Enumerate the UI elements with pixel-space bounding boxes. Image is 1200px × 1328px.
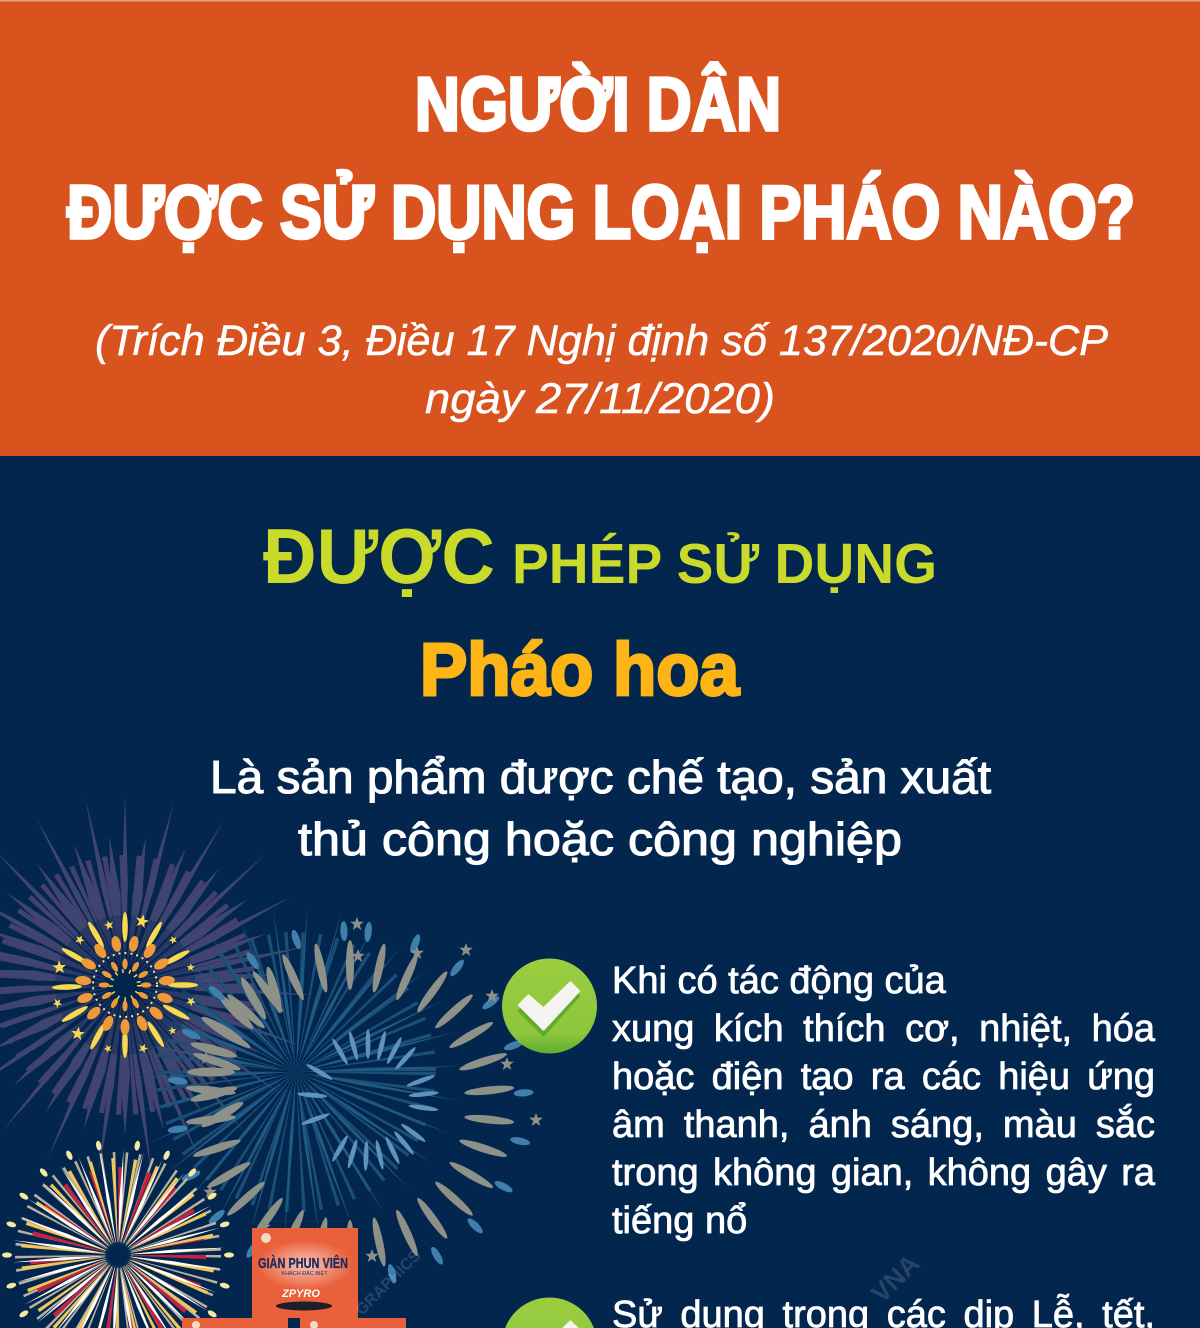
- product box: top: ZPYRO: [281, 1288, 320, 1300]
- main title: NGƯỜI DÂN: [415, 62, 781, 146]
- text block: first point: trong không gian, không gây ra: [612, 1152, 1155, 1194]
- text block: first point: hoặc điện tạo ra các hiệu ứng: [612, 1056, 1155, 1098]
- heading: fireworks: Pháo hoa: [420, 628, 740, 711]
- product box: top: [252, 1228, 358, 1318]
- heading: allowed to use: [263, 512, 937, 600]
- product boxes: bottom row: [182, 1318, 406, 1328]
- definition text: [210, 751, 991, 865]
- main title: [67, 62, 1135, 254]
- heading: allowed to use: ĐƯỢC: [263, 512, 495, 600]
- heading: allowed to use: PHÉP SỬ DỤNG: [512, 531, 937, 596]
- text block: first point: Khi có tác động của: [612, 960, 946, 1002]
- icon: check mark 1: [502, 958, 597, 1054]
- watermark: VNA: [865, 1248, 925, 1308]
- icon: check mark 2: [502, 1298, 597, 1328]
- text block: first point: xung kích thích cơ, nhiệt, hóa: [612, 1008, 1155, 1050]
- definition text: Là sản phẩm được chế tạo, sản xuất: [210, 751, 991, 803]
- watermark: [353, 1247, 925, 1319]
- small stars around blue burst: [199, 917, 543, 1262]
- watermark: GRAPHICS: [353, 1247, 425, 1319]
- product box: top: KHÁCH ĐẶC BIỆT: [281, 1269, 328, 1277]
- firework: gold burst: [51, 912, 198, 1058]
- subtitle: (Trích Điều 3, Điều 17 Nghị định số 137/2020/NĐ-CP: [95, 317, 1108, 365]
- firework: purple burst: [0, 795, 315, 1174]
- firework: multicolour burst: [2, 1140, 234, 1328]
- firework: blue and grey burst: [131, 907, 534, 1289]
- header panel: [0, 0, 1200, 456]
- text block: first point: tiếng nổ: [612, 1200, 747, 1242]
- subtitle: [95, 317, 1108, 423]
- text block: first point: âm thanh, ánh sáng, màu sắc: [612, 1104, 1155, 1146]
- product box: top: GIÀN PHUN VIÊN: [258, 1254, 348, 1272]
- subtitle: ngày 27/11/2020): [425, 375, 775, 423]
- definition text: thủ công hoặc công nghiệp: [298, 813, 902, 865]
